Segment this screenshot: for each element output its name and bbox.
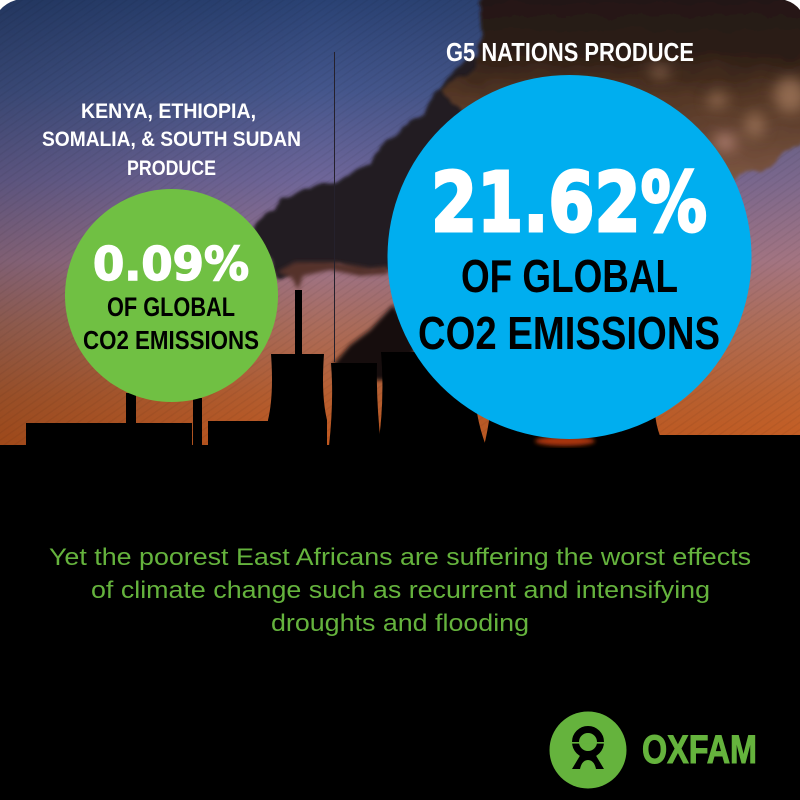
low buildings xyxy=(26,421,272,446)
green circle: East Africa emissions xyxy=(65,189,278,402)
cooling tower one xyxy=(268,354,327,446)
blue circle: G5 emissions xyxy=(388,75,752,439)
background: sunset sky xyxy=(0,0,800,450)
chimney: centre tall xyxy=(295,290,302,358)
icon: Oxfam figure roundel xyxy=(550,712,626,788)
corner: top left xyxy=(0,0,16,10)
corner: top right xyxy=(785,0,800,10)
label: of global CO2 emissions: CO2 EMISSIONS xyxy=(418,307,720,359)
body text: effects of climate change: of climate change such as recurrent and intensifying xyxy=(91,577,710,604)
value: 21.62%: 21.62% xyxy=(431,156,707,251)
heading: G5 nations produce: G5 NATIONS PRODUCE xyxy=(446,37,694,67)
heading: Kenya, Ethiopia, Somalia and South Sudan produce xyxy=(42,99,301,180)
body text: effects of climate change: droughts and flooding xyxy=(271,610,529,637)
smoke plumes xyxy=(253,0,800,380)
value: 0.09%: 0.09% xyxy=(93,237,249,291)
cooling tower two xyxy=(329,363,381,446)
second plume xyxy=(333,305,420,380)
smoke highlight patches xyxy=(650,66,800,151)
label: of global CO2 emissions xyxy=(418,250,720,359)
vertical divider line xyxy=(334,52,336,362)
wordmark: OXFAM xyxy=(642,728,757,772)
label: of global CO2 emissions: OF GLOBAL xyxy=(461,250,678,302)
Oxfam logo xyxy=(550,712,757,788)
heading: Kenya, Ethiopia, Somalia and South Sudan produce: KENYA, ETHIOPIA, xyxy=(81,99,256,123)
black ground and silhouette xyxy=(0,290,800,800)
cooling tower three xyxy=(378,352,486,446)
far horizon xyxy=(655,435,800,446)
label: of global CO2 emissions xyxy=(83,292,259,355)
dark left plume xyxy=(253,60,560,278)
heading: Kenya, Ethiopia, Somalia and South Sudan produce: SOMALIA, & SOUTH SUDAN xyxy=(42,127,301,151)
body text: effects of climate change xyxy=(49,544,751,637)
body text: effects of climate change: Yet the poorest East Africans are suffering the worst effects xyxy=(49,544,751,571)
label: of global CO2 emissions: CO2 EMISSIONS xyxy=(83,325,259,355)
chimney: left pair xyxy=(126,393,202,446)
large upper right plume xyxy=(440,0,800,200)
label: of global CO2 emissions: OF GLOBAL xyxy=(107,292,235,322)
sun glow behind tower xyxy=(535,436,595,446)
lower reddish plume xyxy=(277,262,388,290)
heading: Kenya, Ethiopia, Somalia and South Sudan produce: PRODUCE xyxy=(127,156,216,180)
cooling tower four xyxy=(484,413,662,446)
